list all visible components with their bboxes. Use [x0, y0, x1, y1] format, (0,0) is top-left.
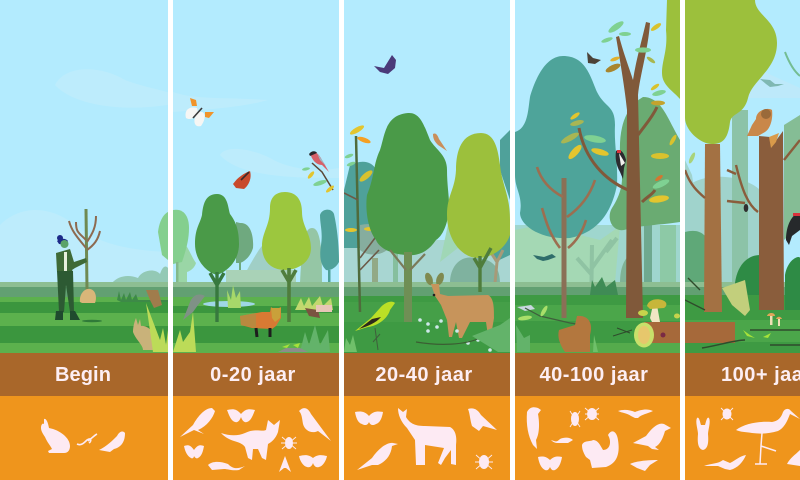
sky	[344, 0, 510, 240]
broken trunk tree	[685, 131, 800, 310]
silhouette: butterfly	[355, 411, 383, 425]
silhouette: butterfly	[227, 409, 255, 422]
label text: 40-100 jaar	[540, 364, 648, 386]
reeds	[227, 285, 241, 308]
foreground grass	[173, 312, 330, 352]
animal panel: begin	[0, 396, 168, 480]
green tree	[610, 97, 680, 230]
animal panel: 20-40 jaar	[344, 396, 510, 480]
silhouette: rabbit	[41, 419, 70, 453]
distant tree line	[112, 266, 168, 283]
tree canopy leaves	[560, 19, 678, 204]
bullfinch on twig	[302, 151, 335, 194]
silhouette: stag beetle	[696, 418, 710, 450]
owl	[747, 109, 772, 136]
light green tree	[173, 210, 189, 286]
band: begin label	[0, 353, 168, 396]
silhouette: rat	[551, 438, 573, 443]
panel: begin	[0, 0, 168, 353]
blossoms	[316, 305, 332, 312]
sapling with leaves	[344, 124, 379, 312]
silhouette: bat	[704, 455, 746, 470]
label text: 20-40 jaar	[375, 364, 473, 386]
foreground grass	[344, 335, 357, 352]
animal panel: 100+ jaar	[685, 396, 800, 480]
white column dividers	[168, 0, 685, 480]
sky	[173, 0, 339, 283]
distant tree	[158, 212, 168, 260]
silhouette: moth	[279, 456, 291, 472]
sky	[515, 0, 680, 283]
butterfly: purple emperor	[374, 55, 396, 74]
panel: 40-100 jaar	[515, 0, 680, 353]
panel: 0-20 jaar	[173, 0, 339, 353]
clouds	[173, 92, 339, 178]
silhouette: butterfly	[538, 456, 562, 470]
panel: 100+ jaar	[684, 0, 800, 353]
silhouette: bug	[281, 437, 297, 449]
squirrel	[558, 316, 591, 352]
silhouette: butterfly left	[184, 445, 204, 458]
background forest	[515, 215, 680, 318]
arc branch	[785, 52, 800, 76]
animal panel: 40-100 jaar	[515, 396, 680, 480]
label text: Begin	[55, 364, 111, 386]
animal panel: 0-20 jaar	[173, 396, 339, 480]
silhouette: bat	[618, 409, 653, 418]
teal tree	[515, 56, 617, 238]
fern background	[590, 277, 618, 295]
large forked tree	[579, 22, 657, 318]
silhouette: bird	[633, 424, 671, 450]
ground stripes	[173, 282, 339, 353]
silhouette: rat	[208, 462, 245, 470]
lime leaves	[743, 330, 771, 338]
silhouette: bird	[99, 431, 125, 452]
planted sapling	[69, 209, 100, 290]
silhouette: deer	[398, 408, 456, 465]
fallen log	[634, 322, 680, 348]
ground stripes	[0, 282, 168, 353]
silhouette: beetle	[585, 408, 599, 420]
butterfly dark	[587, 52, 601, 64]
teal tree	[320, 210, 339, 284]
silhouette: woodpecker	[527, 407, 541, 449]
mushroom on log	[638, 299, 680, 326]
fallen log	[685, 322, 735, 343]
silhouette: bug	[475, 455, 493, 469]
hanging cocoon	[744, 204, 748, 212]
butterfly on grass	[146, 290, 162, 308]
silhouette: insect	[570, 411, 580, 427]
lime crown overlapping	[662, 0, 680, 99]
silhouette: small bug	[721, 408, 733, 420]
distant bird	[760, 79, 784, 87]
fern	[722, 280, 750, 316]
ground	[515, 282, 680, 353]
leaves	[282, 343, 300, 348]
silhouette: cut-off animal	[787, 450, 800, 466]
silhouette: squirrel	[582, 431, 619, 468]
mouse and dirt	[278, 348, 308, 352]
tree shadow	[82, 320, 102, 322]
dark green tree	[195, 194, 239, 322]
band: 40-100 jaar label	[515, 353, 680, 396]
band: 20-40 jaar label	[344, 353, 510, 396]
woodpecker	[616, 150, 626, 179]
silhouette: small bird	[630, 460, 658, 471]
ground	[344, 282, 510, 353]
soft light bands	[730, 70, 800, 98]
silhouette: bird bottom	[357, 443, 398, 470]
sky	[685, 0, 800, 283]
fallen branch	[416, 338, 480, 344]
shrubs	[735, 255, 800, 310]
young tree	[537, 167, 595, 318]
grass tufts far	[117, 291, 169, 302]
small brown bird	[433, 133, 447, 151]
tit on post	[183, 294, 205, 320]
pond	[203, 301, 255, 307]
butterfly: peacock	[233, 171, 251, 189]
mushrooms	[767, 313, 782, 326]
ground	[685, 282, 800, 353]
silhouette: fox	[221, 420, 280, 460]
deer	[423, 272, 494, 338]
golden oriole	[355, 302, 395, 350]
foreground grass	[146, 303, 168, 352]
branches on ground	[685, 278, 800, 348]
sky	[0, 0, 168, 252]
silhouette: bird right	[468, 408, 497, 431]
silhouette: butterfly right	[299, 455, 327, 467]
panel: 20-40 jaar	[344, 0, 510, 353]
butterfly brown on grass	[305, 308, 320, 318]
blue tit on branch	[517, 305, 590, 326]
silhouette: worm	[77, 434, 97, 445]
rabbit	[133, 318, 153, 350]
fox	[240, 307, 281, 337]
twig and fern	[516, 325, 632, 352]
big lime tree crown	[685, 0, 777, 312]
butterfly: white	[186, 98, 214, 126]
distant trees	[176, 222, 322, 284]
fern	[472, 318, 510, 352]
silhouette: bird right	[299, 408, 331, 441]
big green tree	[366, 113, 449, 322]
lime tree	[447, 133, 510, 292]
person planting tree	[55, 235, 87, 320]
black woodpecker	[786, 213, 800, 245]
band: 100+ jaar label	[685, 353, 800, 396]
silhouette: bird	[180, 408, 215, 437]
flowers	[418, 318, 492, 352]
label text: 0-20 jaar	[210, 364, 296, 386]
lime green tree	[262, 192, 311, 322]
grass far	[295, 296, 333, 310]
clouds	[0, 70, 168, 282]
root ball	[80, 289, 96, 303]
background forest	[344, 130, 510, 284]
bat	[533, 254, 556, 261]
silhouette: stork	[736, 409, 800, 464]
band: 0-20 jaar label	[173, 353, 339, 396]
background trees	[684, 110, 800, 283]
